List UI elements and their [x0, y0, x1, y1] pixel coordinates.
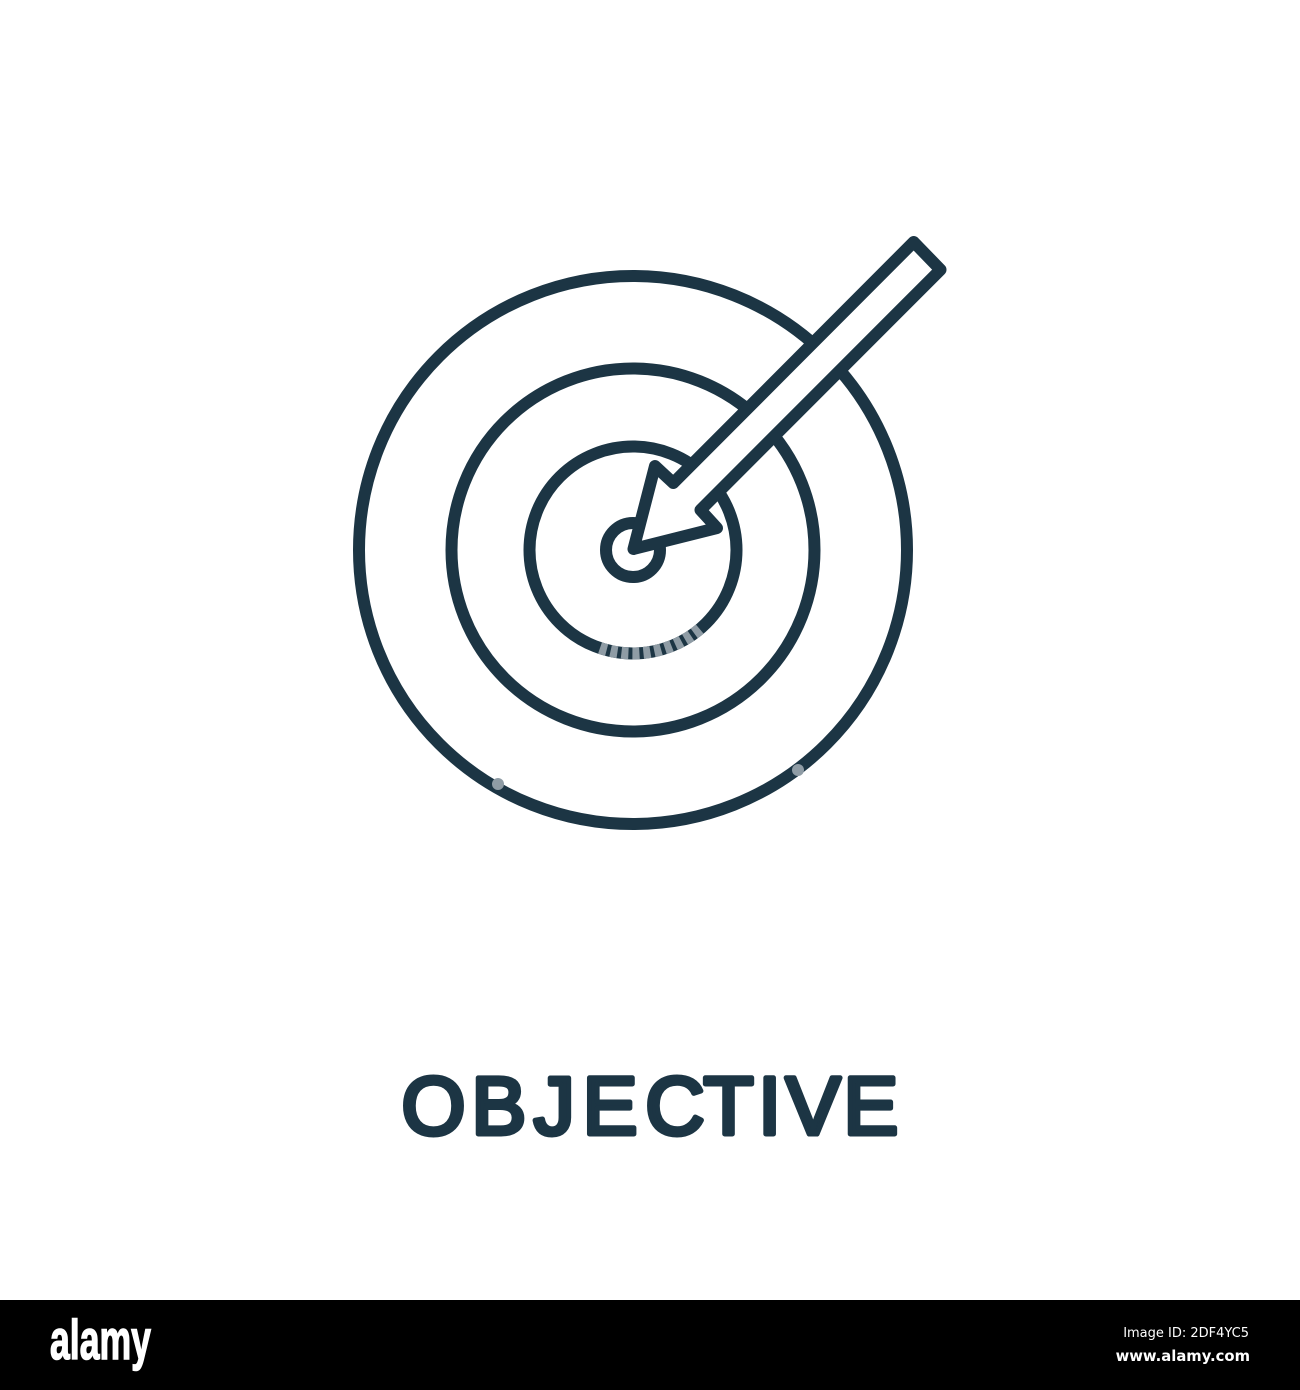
- icon: target with arrow: [359, 242, 940, 824]
- image id: Image ID: 2DF4YC5: [1123, 1326, 1249, 1341]
- watermark patch on inner ring: [600, 628, 701, 653]
- target bullseye: [606, 523, 660, 577]
- logo wordmark: alamy: [50, 1308, 151, 1371]
- watermark patch right on outer ring: [792, 764, 804, 776]
- footer bar: [0, 1300, 1300, 1390]
- target outer ring: [359, 276, 907, 824]
- website: www.alamy.com: [1116, 1348, 1250, 1365]
- title: OBJECTIVE: [402, 1061, 898, 1152]
- target middle ring: [452, 368, 814, 732]
- target inner ring: [530, 446, 736, 654]
- arrow: [634, 242, 940, 549]
- watermark patch left on outer ring: [492, 778, 504, 790]
